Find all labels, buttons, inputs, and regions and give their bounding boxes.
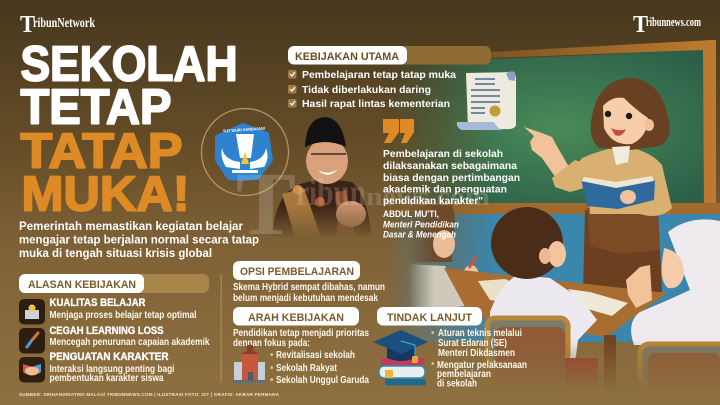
chalkboard and wall [375,40,720,342]
ministry emblem [202,108,288,196]
quote [383,149,520,240]
list: fokus: • [270,375,274,386]
logo: TribunNetwork: T [20,12,35,38]
icon: graduation cap and books [373,330,428,386]
checklist: Hasil rapat lintas kementerian [302,99,450,110]
classroom illustration [375,40,720,399]
reason: cegah learning loss: Mencegah penurunan capaian akademik [50,337,210,348]
intro text: mengajar tetap berjalan normal secara tatap [19,232,259,246]
reason: kualitas belajar [50,297,196,321]
body: opsi pembelajaran [233,282,385,304]
checklist: Tidak diberlakukan daring [302,85,431,96]
quote attribution [383,209,459,240]
quote attribution: ABDUL MU'TI, [383,209,439,219]
left student [410,205,478,307]
intro text: muka di tengah situasi krisis global [19,246,212,260]
list: tindak lanjut: Mengatur pelaksanaan [437,360,527,371]
list: tindak lanjut: pembelajaran [437,369,491,380]
reason: kualitas belajar: KUALITAS BELAJAR [50,297,146,309]
heading: alasan kebijakan [19,274,209,293]
logo: TribunNetwork: ribunNetwork [33,16,95,31]
list: tindak lanjut: di sekolah [437,378,477,390]
quote: pendidikan karakter" [383,196,483,207]
checklist: Pembelajaran tetap tatap muka [302,70,456,81]
title: SEKOLAH [20,38,238,92]
reason: penguatan karakter: Interaksi langsung penting bagi [50,364,174,375]
heading: opsi pembelajaran: OPSI PEMBELAJARAN [240,266,354,278]
list: tindak lanjut: Menteri Dikdasmen [438,348,515,359]
watermark: news.com [366,182,490,211]
heading: alasan kebijakan: ALASAN KEBIJAKAN [28,279,136,291]
logo: TribunNetwork [20,12,95,38]
quote: Pembelajaran di sekolah [383,149,503,160]
watermark: ribun [296,172,366,214]
icon: quotation mark [383,119,414,143]
reason: cegah learning loss: CEGAH LEARNING LOSS [50,325,164,337]
logo: Tribunnews: T [633,12,648,38]
body: opsi pembelajaran: Skema Hybrid sempat dibahas, namun [233,282,385,293]
body: arah kebijakan: Pendidikan tetap menjadi prioritas [233,328,369,339]
watermark [236,155,490,254]
quote: biasa dengan pertimbangan [383,173,520,184]
logo: Tribunnews [633,12,701,38]
checklist [288,70,456,110]
icon: scroll document [457,71,516,130]
desk with books [444,268,667,382]
icon: handshake [19,357,45,382]
reason: cegah learning loss [50,325,210,348]
watermark: T [236,155,296,254]
quote attribution: Dasar & Menengah [383,230,456,240]
panel: arah kebijakan [233,307,370,386]
list: fokus: • [270,350,274,361]
list: fokus: Sekolah Rakyat [276,363,338,374]
title [20,38,238,222]
heading: kebijakan utama: KEBIJAKAN UTAMA [295,51,399,63]
boy student [487,207,598,386]
reason: penguatan karakter [50,351,174,384]
panel: kebijakan utama [288,46,491,110]
title: MUKA! [22,168,190,222]
heading: tindak lanjut: TINDAK LANJUT [387,312,472,324]
list: tindak lanjut: • [431,359,435,370]
panel: tindak lanjut [373,307,527,390]
intro text [19,219,259,260]
heading: arah kebijakan: ARAH KEBIJAKAN [248,312,344,324]
panel: alasan kebijakan [19,274,210,384]
list: fokus: Revitalisasi sekolah [276,350,355,361]
icon: school building [233,344,266,383]
quote: akademik dan penguatan [383,184,507,196]
reason: penguatan karakter: PENGUATAN KARAKTER [50,351,169,363]
icon: book with light bulb [19,299,45,324]
panel: opsi pembelajaran [233,261,385,304]
intro text: Pemerintah memastikan kegiatan belajar [19,219,243,233]
heading: tindak lanjut [377,307,482,326]
list: tindak lanjut [431,328,527,390]
teacher [524,78,672,292]
quote attribution: Menteri Pendidikan [383,220,459,230]
list: fokus: Sekolah Unggul Garuda [276,375,370,386]
girl student in hijab [626,219,720,399]
footer credits: SUMBER: SRIHANDRIATMO MALAU/ TRIBUNNEWS.COM | ILUSTRASI FOTO: IST | GRAFIS: AKBAR PERMANA [19,392,280,397]
icon: broken chain [19,328,45,354]
list: fokus [270,350,370,386]
reason: penguatan karakter: pembentukan karakter siswa [50,373,164,384]
list: tindak lanjut: Aturan teknis melalui [438,328,522,339]
reason: kualitas belajar: Menjaga proses belajar tetap optimal [50,310,196,321]
body: arah kebijakan: dengan fokus pada: [233,338,310,349]
body: opsi pembelajaran: belum menjadi kebutuhan mendesak [233,293,379,304]
photo: minister [272,117,372,240]
title: TATAP [20,124,183,178]
heading: kebijakan utama [288,46,491,64]
body: arah kebijakan [233,328,369,349]
list: tindak lanjut: • [431,328,435,339]
list: tindak lanjut: Surat Edaran (SE) [438,338,507,349]
title: TETAP [20,80,172,134]
heading: opsi pembelajaran [233,261,360,280]
list: fokus: • [270,363,274,374]
quote: dilaksanakan sebagaimana [383,161,517,172]
ministry emblem: TUT WURI HANDAYANI [223,126,265,134]
